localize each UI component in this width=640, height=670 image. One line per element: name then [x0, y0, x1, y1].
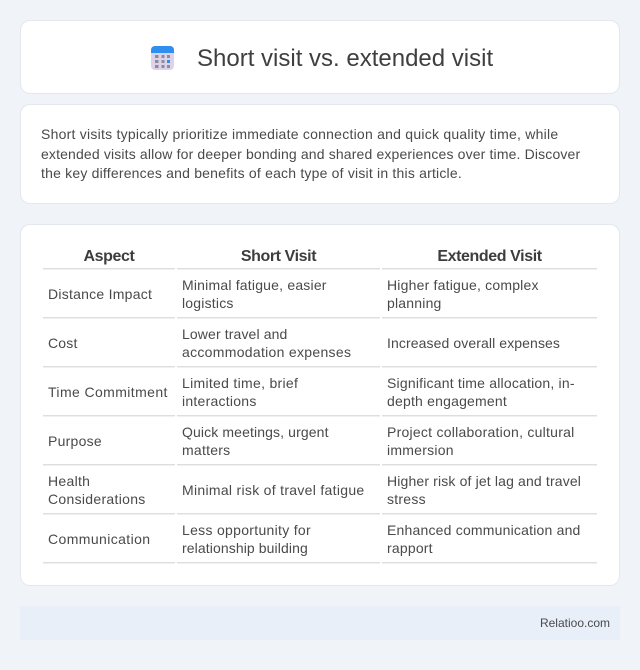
row: Distance Impact: Distance Impact — [48, 286, 152, 302]
row: Health Considerations: Minimal risk of travel fatigue — [182, 482, 365, 498]
row: Purpose: Purpose — [48, 433, 102, 449]
title: Short visit vs. extended visit — [197, 45, 493, 72]
row: Distance Impact — [48, 277, 539, 311]
row: Communication: Enhanced communication and — [387, 522, 581, 538]
row: Health Considerations: Considerations — [48, 491, 146, 507]
intro text panel — [20, 104, 620, 204]
row: Distance Impact: Minimal fatigue, easier — [182, 277, 327, 293]
intro paragraph: extended visits allow for deeper bonding and shared experiences over time. Discover — [41, 146, 580, 162]
row: Purpose — [48, 424, 575, 458]
row: Distance Impact: logistics — [182, 295, 234, 311]
title card — [20, 20, 620, 94]
row: Health Considerations — [48, 473, 581, 507]
row: Purpose: matters — [182, 442, 230, 458]
row: Health Considerations: stress — [387, 491, 426, 507]
footer bar — [20, 606, 620, 640]
row: Time Commitment: Significant time allocation, in- — [387, 375, 575, 391]
row: Communication — [48, 522, 581, 556]
row: Communication: relationship building — [182, 540, 308, 556]
row: Communication: Communication — [48, 531, 150, 547]
row: Purpose: immersion — [387, 442, 454, 458]
row: Time Commitment: interactions — [182, 393, 257, 409]
row: Health Considerations: Higher risk of jet lag and travel — [387, 473, 581, 489]
row: Communication: rapport — [387, 540, 433, 556]
intro paragraph: the key differences and benefits of each type of visit in this article. — [41, 165, 462, 181]
row: Cost: Cost — [48, 335, 78, 351]
header row: Aspect — [84, 248, 134, 265]
row: Health Considerations: Health — [48, 473, 90, 489]
row: Cost: Lower travel and — [182, 326, 287, 342]
header row: Extended Visit — [437, 248, 542, 265]
row: Distance Impact: planning — [387, 295, 442, 311]
row: Time Commitment — [48, 375, 575, 409]
row: Cost: Increased overall expenses — [387, 335, 560, 351]
icon: calendar — [151, 46, 174, 70]
row: Distance Impact: Higher fatigue, complex — [387, 277, 539, 293]
row: Communication: Less opportunity for — [182, 522, 311, 538]
intro paragraph — [41, 126, 580, 181]
row: Time Commitment: Time Commitment — [48, 384, 168, 400]
intro paragraph: Short visits typically prioritize immediate connection and quick quality time, while — [41, 126, 558, 142]
row: Purpose: Project collaboration, cultural — [387, 424, 575, 440]
row: Time Commitment: depth engagement — [387, 393, 507, 409]
footer credit: Relatioo.com — [540, 616, 610, 630]
comparison table panel — [20, 224, 620, 586]
row: Time Commitment: Limited time, brief — [182, 375, 298, 391]
header row: Short Visit — [241, 248, 316, 265]
row: Cost: accommodation expenses — [182, 344, 351, 360]
row: Cost — [48, 326, 560, 360]
header row — [84, 248, 542, 265]
row: Purpose: Quick meetings, urgent — [182, 424, 329, 440]
